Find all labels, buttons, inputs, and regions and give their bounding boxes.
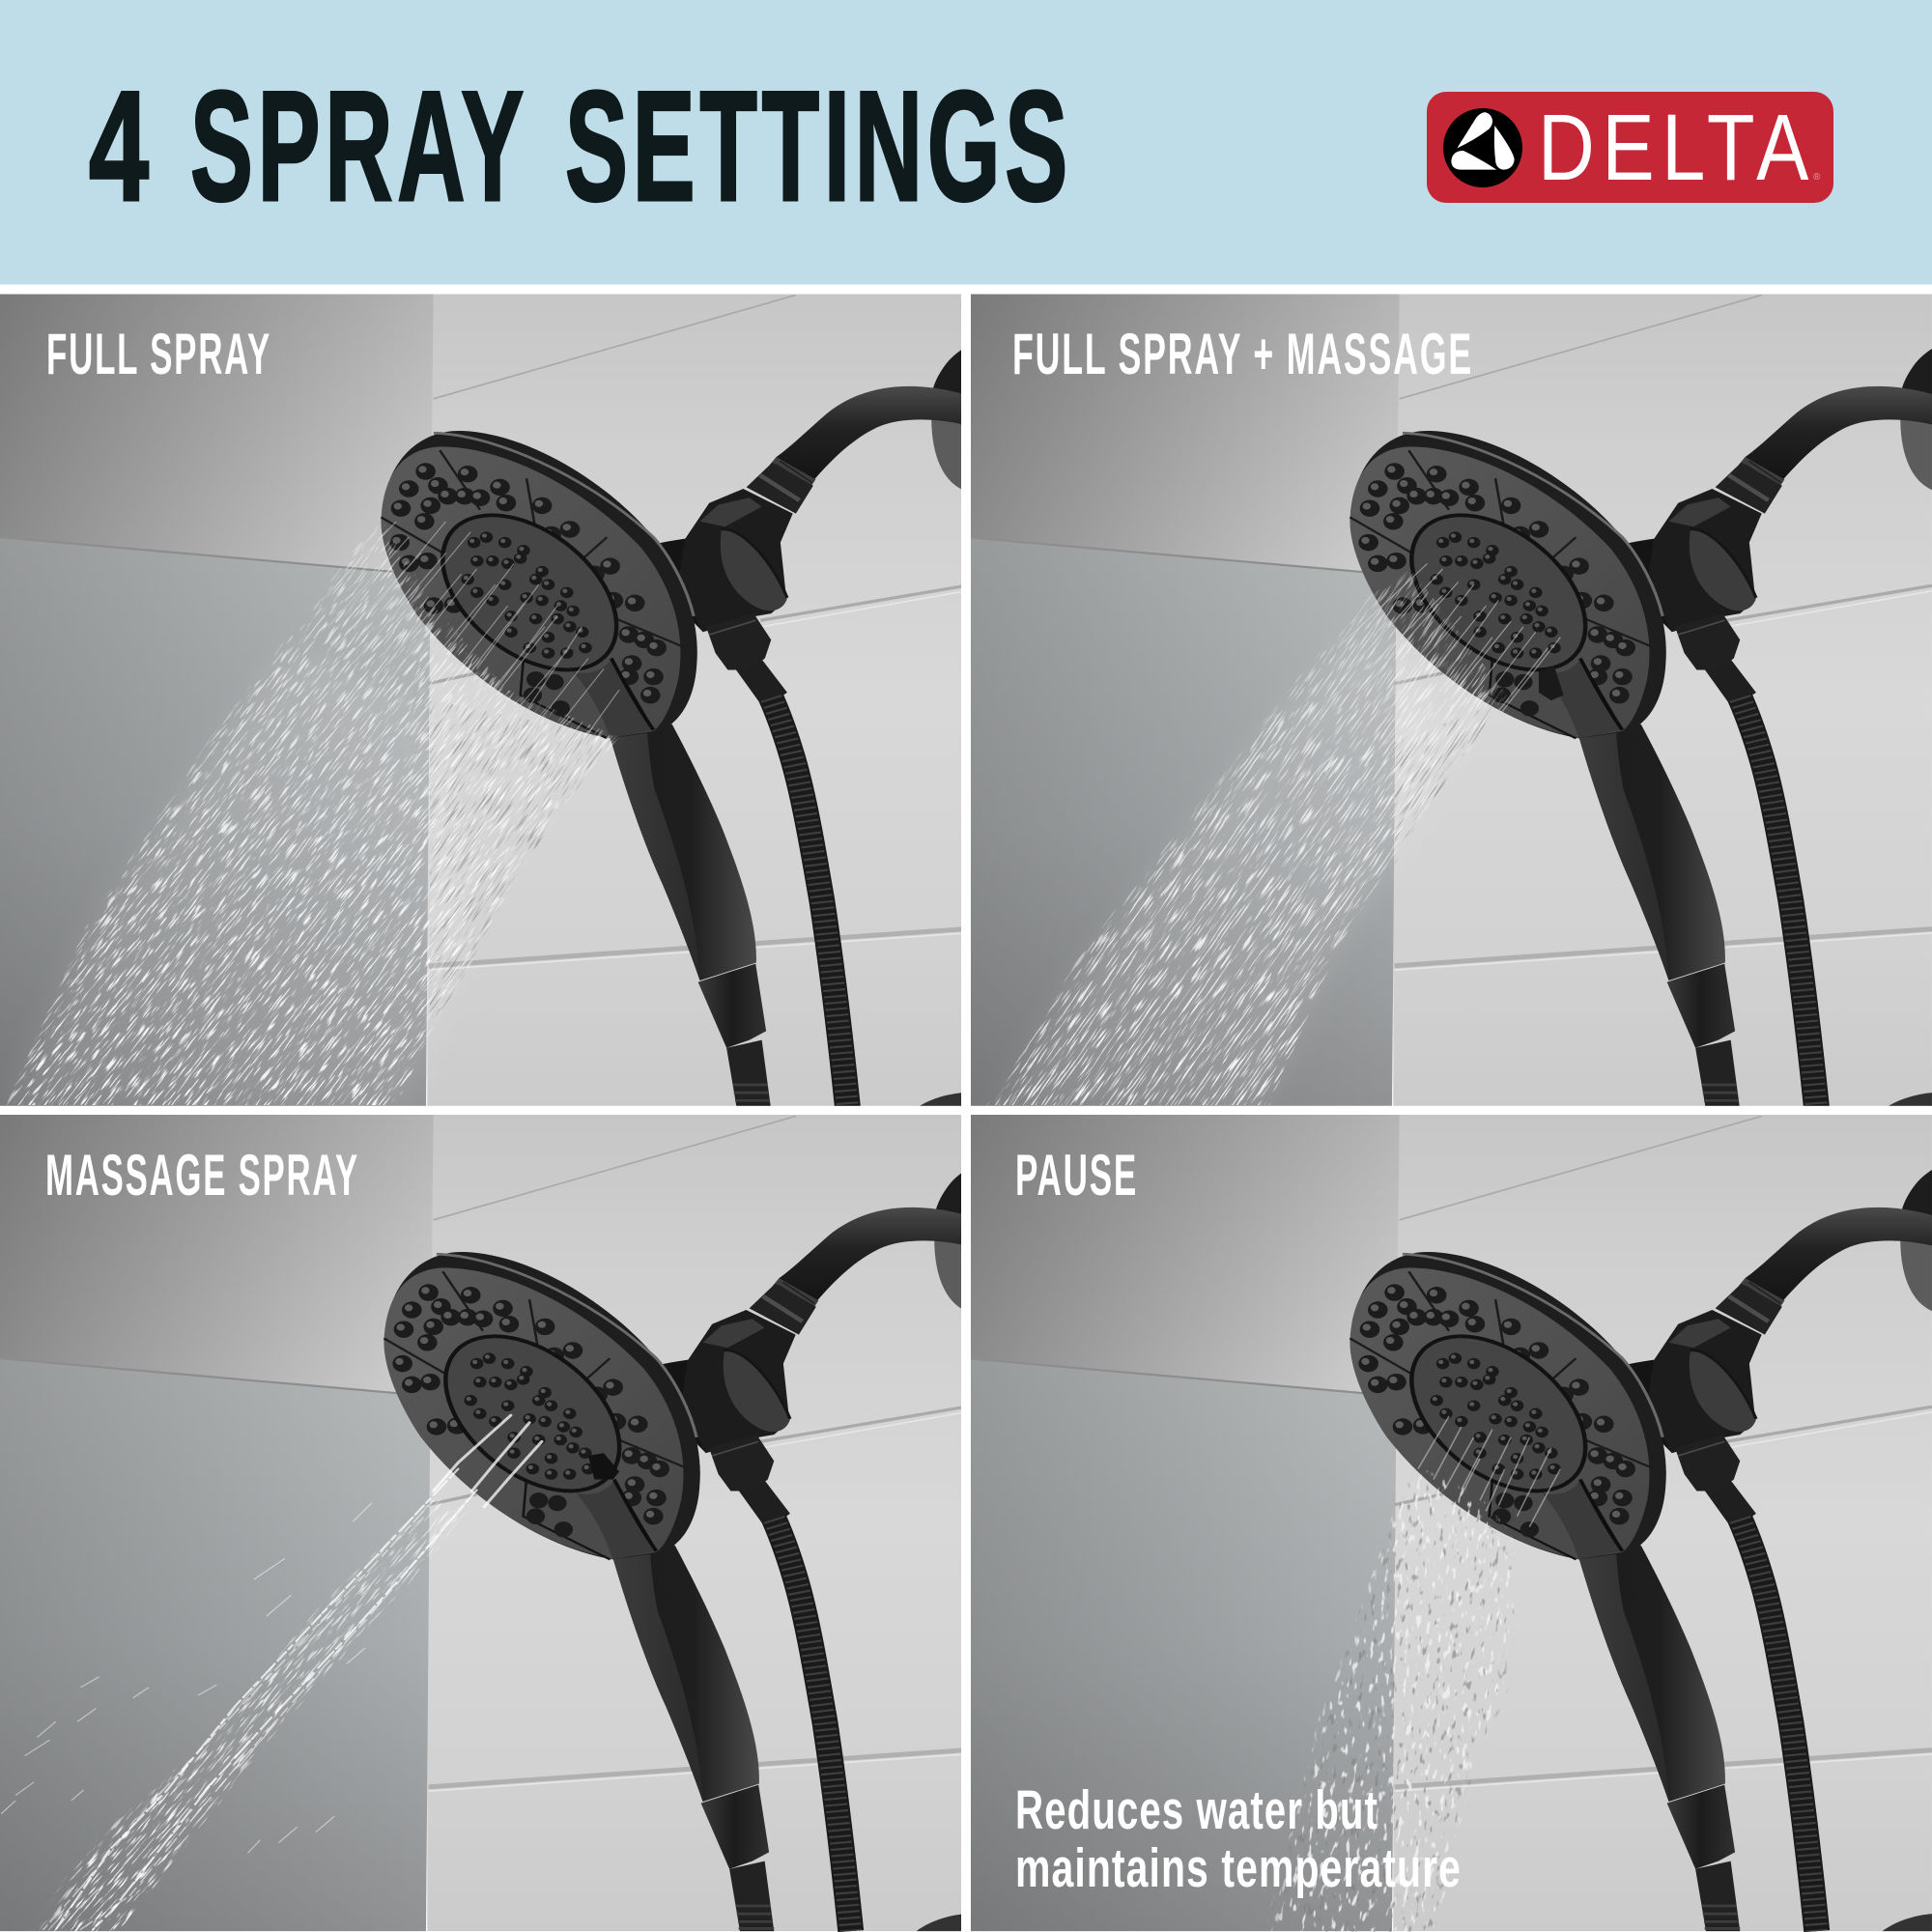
caption line 2: maintains temperature: [1015, 1837, 1462, 1899]
shower head and handset: [384, 1170, 966, 1931]
label: PAUSE: [1015, 1143, 1138, 1208]
panel: massage spray: [0, 1111, 966, 1932]
dripping droplets, dark: [1264, 1469, 1517, 1932]
dripping droplets, light: [1264, 1469, 1517, 1932]
icon: Delta triangle mark: [1443, 108, 1522, 187]
title word: SETTINGS: SETTINGS: [565, 59, 1072, 234]
registered mark: ®: [1813, 172, 1821, 183]
label: FULL SPRAY + MASSAGE: [1012, 322, 1473, 386]
water streaks on the wall: [1395, 705, 1492, 864]
shower head and handset: [1350, 1170, 1932, 1931]
stray droplets: [1, 1503, 372, 1853]
shower head and handset: [381, 349, 963, 1110]
panel: full spray: [0, 290, 966, 1110]
title word: SPRAY: SPRAY: [190, 59, 528, 234]
title: [89, 59, 1072, 234]
wall background: [966, 1111, 1932, 1931]
label: MASSAGE SPRAY: [45, 1143, 359, 1208]
title word: 4: 4: [89, 59, 149, 234]
shower head and handset: [1350, 349, 1932, 1110]
caption line 1: Reduces water but: [1015, 1779, 1378, 1841]
wall background: [0, 290, 966, 1110]
pause lever: [1539, 667, 1564, 700]
wall background: [966, 290, 1932, 1110]
trickles leaving the nozzles: [1418, 1416, 1560, 1527]
spray haze: [24, 675, 429, 1105]
water streaks: [985, 569, 1511, 1105]
long jets leaving the nozzles: [1338, 563, 1560, 743]
panel: full spray + massage: [966, 290, 1932, 1110]
label: FULL SPRAY: [46, 322, 271, 386]
pause lever: [588, 1453, 619, 1480]
jet texture: [25, 1495, 470, 1932]
wordmark: DELTA: [1538, 95, 1816, 200]
water streaks on the wall: [430, 700, 619, 1027]
panel: pause: [966, 1111, 1932, 1932]
water streaks: [6, 522, 619, 1105]
wall background: [0, 1111, 966, 1931]
caption: [1015, 1779, 1462, 1899]
massage jets: [43, 1415, 542, 1929]
spray haze: [1014, 664, 1395, 1105]
logo: Delta: [1427, 92, 1833, 203]
long jets leaving the nozzles: [322, 522, 619, 811]
header band: [0, 0, 1932, 284]
